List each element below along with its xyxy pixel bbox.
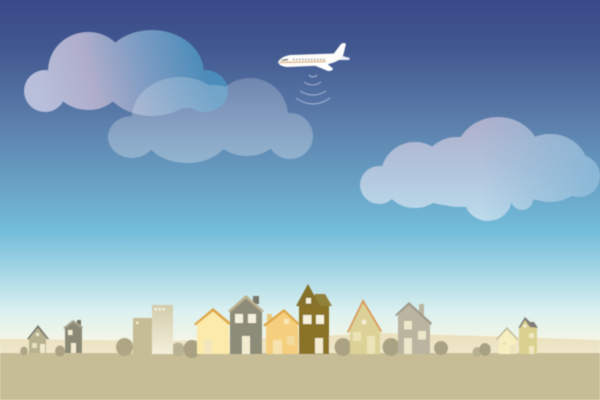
cloud: right bbox=[358, 115, 600, 223]
cheatline stripe bbox=[279, 62, 326, 63]
small pale house bbox=[496, 327, 518, 354]
small grey house bbox=[27, 325, 49, 353]
beige house with chimney bbox=[395, 302, 432, 354]
bushes right bbox=[434, 341, 491, 357]
small tall house bbox=[518, 317, 538, 354]
yellow house bbox=[194, 308, 231, 354]
distant hill band bbox=[0, 333, 600, 356]
small dark house bbox=[63, 320, 83, 353]
wing bbox=[311, 63, 333, 71]
cloud: centre, translucent bbox=[105, 75, 317, 165]
bush bbox=[382, 338, 400, 356]
fuselage bbox=[278, 54, 342, 67]
cockpit window bbox=[281, 58, 288, 61]
brown house bbox=[296, 284, 332, 354]
tail fin bbox=[332, 43, 346, 56]
signal waves bbox=[296, 75, 330, 104]
bushes left bbox=[20, 338, 201, 358]
cloud: upper left bbox=[24, 30, 228, 116]
grey house with chimney bbox=[228, 295, 264, 354]
cream house with orange roof bbox=[347, 299, 382, 354]
ground bbox=[0, 353, 600, 400]
building: tall block bbox=[152, 305, 173, 354]
bush bbox=[334, 338, 352, 356]
orange-yellow house bbox=[263, 309, 299, 354]
cabin windows bbox=[293, 58, 326, 60]
airplane bbox=[278, 43, 350, 71]
tailplane bbox=[335, 54, 350, 60]
building: low block bbox=[133, 318, 152, 354]
village scene bbox=[0, 284, 600, 400]
